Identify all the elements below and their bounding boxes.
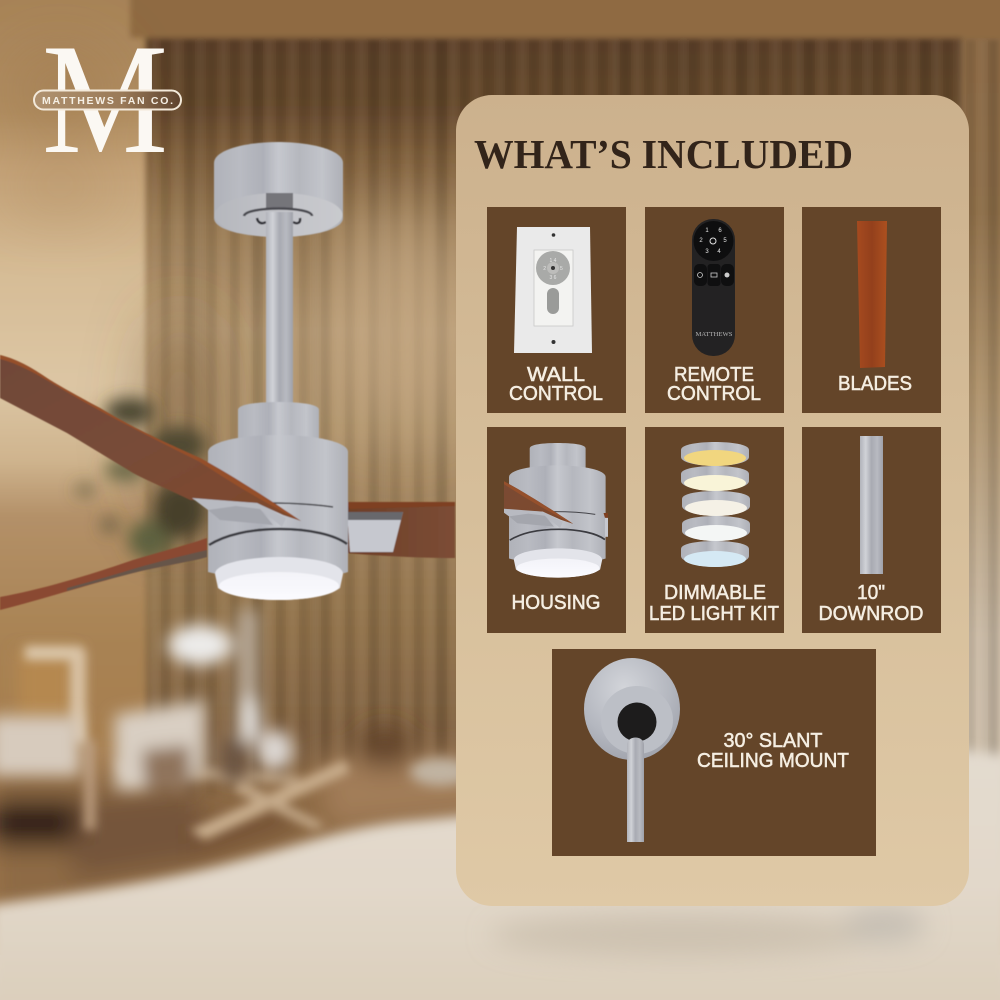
- label: BLADES: [838, 372, 912, 395]
- label: LED LIGHT KIT: [649, 602, 779, 625]
- icon: remote: 6: [718, 228, 722, 234]
- icon: remote: 1: [705, 228, 709, 234]
- label: 10": [857, 581, 885, 604]
- fan blade: right: [345, 502, 455, 558]
- icon: wall control plate: 3 6: [550, 275, 557, 281]
- tile: housing: [366, 411, 626, 633]
- icon: wood blade: [857, 221, 887, 368]
- ceiling fan photo: [0, 142, 455, 610]
- logo: Matthews Fan Co. monogram: M: [42, 12, 168, 187]
- label: [667, 363, 761, 405]
- icon: wall control plate: 1 4: [550, 258, 557, 264]
- icon: remote: 5: [723, 238, 727, 244]
- icon: remote: 2: [699, 238, 703, 244]
- fan blade: lower left: [0, 538, 207, 610]
- icon: remote: MATTHEWS: [696, 332, 732, 338]
- label: [697, 729, 849, 772]
- label: WALL: [527, 363, 585, 386]
- label: CONTROL: [509, 382, 603, 405]
- heading: WHAT’S INCLUDED: [474, 131, 853, 177]
- label: [649, 581, 779, 625]
- icon: wall control plate: [514, 227, 592, 353]
- label: HOUSING: [512, 591, 600, 614]
- tile: blades: [802, 207, 941, 413]
- fan canopy: [214, 142, 343, 237]
- icon: downrod: [860, 436, 883, 574]
- icon: motor housing: [504, 443, 608, 578]
- label: DOWNROD: [818, 602, 924, 625]
- tile: wall control: [487, 207, 626, 413]
- label: CEILING MOUNT: [697, 749, 849, 772]
- icon: remote: 4: [717, 249, 721, 255]
- tile: dimmable LED light kit: [645, 427, 784, 633]
- icon: remote: [692, 219, 735, 356]
- icon: slant mount: [584, 658, 680, 842]
- icon: five light colour discs: [681, 442, 750, 567]
- label: 30° SLANT: [724, 729, 823, 752]
- fan downrod: [266, 212, 293, 404]
- tile: 30 degree slant ceiling mount: [552, 649, 876, 856]
- tile: remote control: [645, 207, 784, 413]
- fan motor housing: [208, 402, 348, 600]
- label: CONTROL: [667, 382, 761, 405]
- label: REMOTE: [674, 363, 754, 386]
- fan blade: upper left with bracket: [0, 355, 301, 527]
- panel: what's included: [366, 95, 969, 906]
- label: [509, 363, 603, 405]
- tile: 10 inch downrod: [802, 427, 941, 633]
- label: [818, 581, 924, 625]
- logo: Matthews Fan Co. monogram: MATTHEWS FAN CO.: [42, 95, 173, 107]
- icon: wall control plate: 2 5: [543, 266, 563, 272]
- icon: remote: 3: [705, 249, 709, 255]
- label: DIMMABLE: [664, 581, 766, 604]
